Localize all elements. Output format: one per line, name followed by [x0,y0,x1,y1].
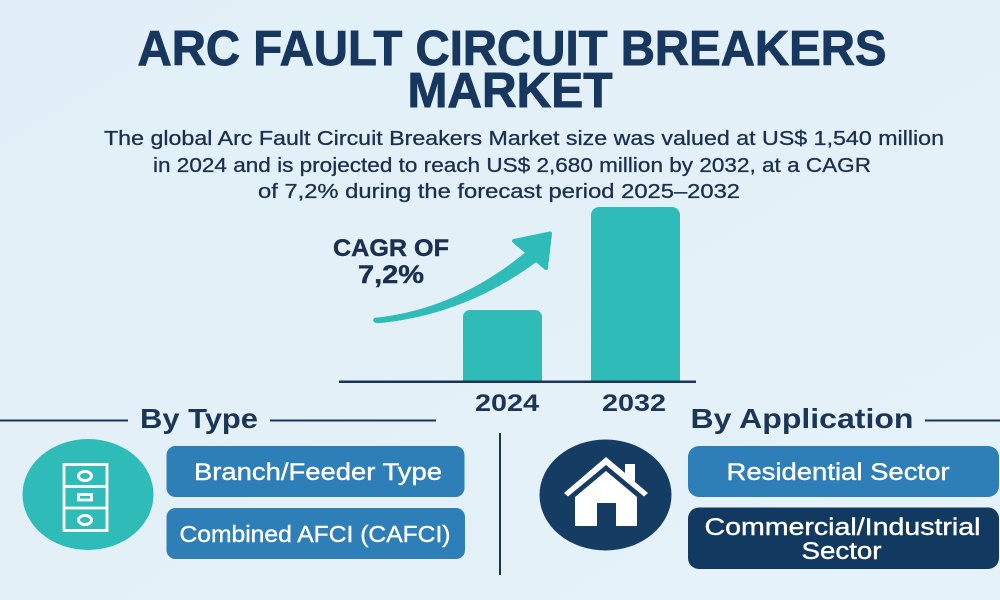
panel: by type [0,403,465,559]
button: Residential Sector [688,446,999,497]
summary text: of 7,2% during the forecast period 2025–2032 [258,180,740,203]
summary text: The global Arc Fault Circuit Breakers Market size was valued at US$ 1,540 million [104,127,944,150]
panel: by application [540,403,1000,569]
CAGR label [333,235,449,289]
arrow: growth [373,234,550,323]
button: Commercial/Industrial Sector: Sector [802,538,882,565]
button: Commercial/Industrial Sector: Commercial/Industrial [704,514,980,541]
title: ARC FAULT CIRCUIT BREAKERS [138,22,886,76]
bar chart [339,207,696,417]
button: Branch/Feeder Type: Branch/Feeder Type [194,459,442,486]
CAGR label: CAGR OF [333,235,449,262]
button: Combined AFCI (CAFCI): Combined AFCI (CAFCI) [180,521,450,547]
bar: 2032 [591,207,680,382]
button: Combined AFCI (CAFCI) [166,508,465,559]
heading: by type: By Type [140,403,258,434]
title: MARKET [408,64,613,118]
CAGR label: 7,2% [358,261,424,289]
summary text [104,127,944,203]
title [138,22,886,118]
bar: 2024 [463,310,542,382]
chart axis [339,380,696,383]
summary text: in 2024 and is projected to reach US$ 2,680 million by 2032, at a CAGR [153,154,871,177]
year labels: 2024 [475,390,540,417]
button: Residential Sector: Residential Sector [726,459,950,486]
heading: by application: By Application [690,403,914,434]
button: Commercial/Industrial Sector [688,508,999,569]
year labels: 2032 [602,390,666,417]
icon: breaker panel [22,439,154,550]
center divider [499,433,501,575]
year labels [475,390,666,417]
button: Branch/Feeder Type [166,446,464,497]
icon: house [540,440,672,550]
